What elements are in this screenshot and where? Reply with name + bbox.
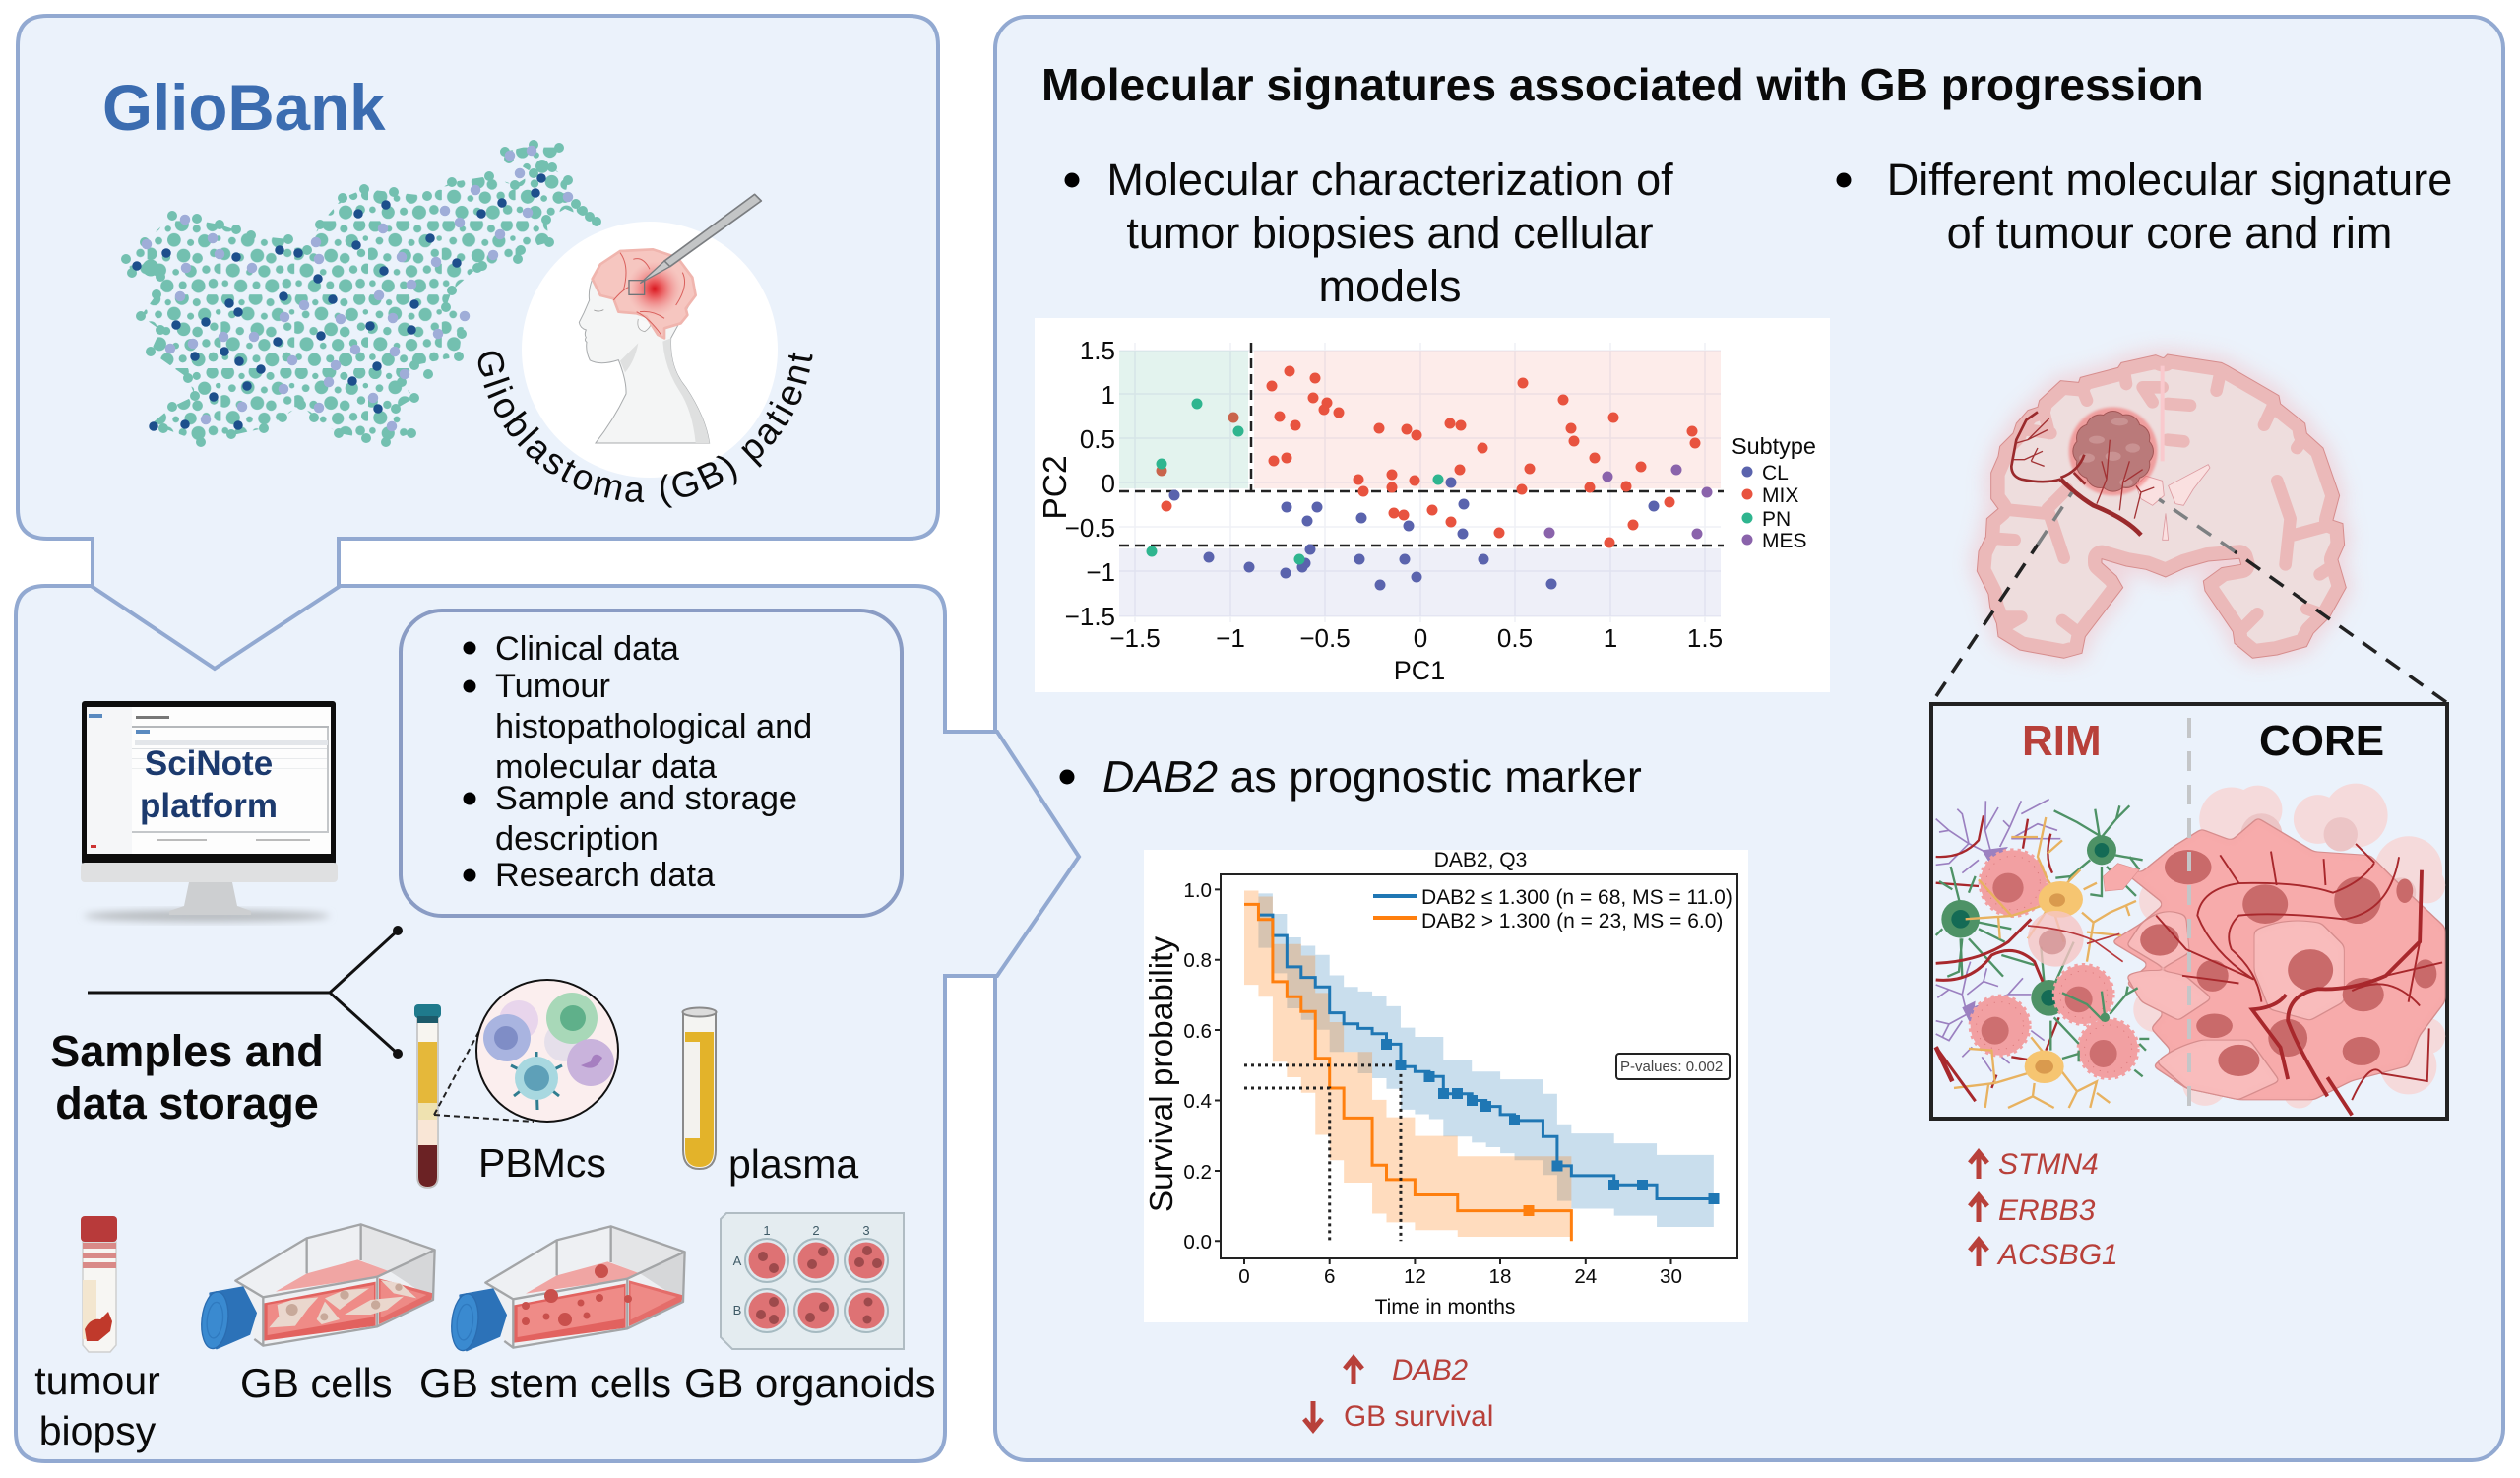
km chart title: DAB2, Q3	[1434, 849, 1527, 871]
map of Slovenia in dots	[126, 145, 597, 442]
axis tick labels: −0.5	[1065, 513, 1115, 543]
km tick labels: 0	[1238, 1265, 1250, 1288]
p-value box: P-values: 0.002	[1620, 1059, 1723, 1075]
text box: data types: description	[495, 820, 659, 858]
curve blue	[1258, 915, 1714, 1198]
legend: subtype: PN	[1762, 508, 1791, 531]
icon: plasma tube	[683, 1008, 717, 1169]
icon: organoid well plate: 1	[763, 1223, 771, 1238]
dashed zoom lines from brain to box	[1936, 492, 2446, 702]
text box: data types: Tumour	[495, 668, 610, 705]
axis tick labels: −1.5	[1109, 623, 1161, 653]
label: SciNote platform: SciNote	[145, 744, 273, 783]
axis tick labels: 1.5	[1080, 336, 1115, 365]
icon: flask GB stem cells	[449, 1226, 685, 1352]
bullet: molecular characterization: tumor biopsies and cellular	[1126, 208, 1654, 258]
p-value box	[1616, 1054, 1730, 1079]
bullet: core and rim signature	[1837, 155, 2452, 258]
legend: subtype: MIX	[1762, 484, 1798, 507]
legend: subtype: Subtype	[1732, 433, 1816, 459]
label: RIM: RIM	[2022, 717, 2102, 765]
axis tick labels: 1.5	[1687, 623, 1723, 653]
km tick labels: 1.0	[1183, 879, 1212, 902]
icon: blood tube	[414, 1004, 441, 1188]
axis tick labels: 0	[1102, 469, 1115, 498]
bullet: molecular characterization: models	[1318, 261, 1462, 311]
axis tick labels: 1	[1102, 380, 1115, 410]
bullet: core and rim signature: Different molecular signature	[1887, 155, 2452, 205]
bullet: molecular characterization	[1065, 155, 1673, 311]
arrow up: DAB2	[1345, 1358, 1362, 1384]
label: PBMcs: PBMcs	[478, 1140, 606, 1186]
chart: PCA scatter plot	[1035, 318, 1830, 692]
heading: GlioBank: GlioBank	[102, 72, 386, 144]
panel: analysis	[995, 17, 2503, 1460]
panel: rim and core illustration	[1931, 704, 2447, 1119]
dashed zoom lines to PBMC	[434, 1029, 534, 1122]
icon: organoid well plate: 2	[812, 1223, 820, 1238]
label: GB organoids: GB organoids	[684, 1360, 936, 1406]
text box: data types: molecular data	[495, 748, 718, 786]
km tick labels: 12	[1404, 1265, 1426, 1288]
label: Glioblastoma (GB) patient curved: Glioblastoma (GB) patient	[478, 351, 813, 508]
icon: organoid well plate	[721, 1213, 904, 1349]
confidence band orange	[1244, 890, 1571, 1237]
median lines	[1244, 1065, 1401, 1241]
panel: samples and data storage	[16, 586, 1079, 1461]
axis tick labels: −0.5	[1299, 623, 1351, 653]
axis tick labels: 0.5	[1080, 424, 1115, 454]
curve orange	[1244, 904, 1571, 1241]
km y axis title: Survival probability	[1144, 936, 1180, 1212]
core tumour cells	[2110, 784, 2445, 1115]
rim neurons and glia	[1936, 800, 2149, 1108]
km tick labels: 0.8	[1183, 949, 1212, 972]
km tick labels	[1183, 879, 1682, 1288]
label: SciNote platform: platform	[140, 787, 278, 825]
km legend	[1373, 886, 1732, 932]
arrow down: GB survival	[1304, 1401, 1322, 1430]
icon: organoid well plate: A	[733, 1253, 742, 1268]
axis tick labels: −1	[1086, 557, 1115, 587]
km tick labels: 0.0	[1183, 1231, 1212, 1253]
gene list: rim markers: ACSBG1	[1996, 1239, 2118, 1271]
heading: Samples and data storage: data storage	[55, 1078, 319, 1128]
icon: patient head with brain and scalpel	[522, 194, 778, 478]
icon: organoid well plate: B	[733, 1303, 741, 1317]
chart: Kaplan-Meier survival plot	[1144, 849, 1748, 1322]
text box: data types: Clinical data	[495, 630, 680, 668]
gene list: rim markers: STMN4	[1998, 1148, 2099, 1181]
axis tick labels: 1	[1604, 623, 1617, 653]
icon: SciNote monitor	[81, 701, 338, 922]
label: tumour biopsy: biopsy	[39, 1408, 157, 1453]
axis title PC2: PC2	[1038, 455, 1074, 520]
km tick labels: 0.2	[1183, 1161, 1212, 1184]
bullet: core and rim signature: of tumour core and rim	[1947, 208, 2392, 258]
text box: data types: Research data	[495, 857, 716, 894]
icon: PBMC circle	[476, 980, 618, 1122]
illustration: coronal brain with tumour	[1977, 354, 2346, 658]
km tick labels: 24	[1574, 1265, 1597, 1288]
km legend: DAB2 ≤ 1.300 (n = 68, MS = 11.0)	[1421, 886, 1732, 909]
km tick labels: 0.4	[1183, 1090, 1212, 1113]
heading: Samples and data storage: Samples and	[50, 1026, 324, 1076]
label: GB cells: GB cells	[240, 1360, 393, 1406]
bullet: DAB2 prognostic marker: DAB2 as prognostic marker	[1102, 752, 1642, 802]
icon: tumour biopsy vial	[81, 1216, 117, 1352]
axis tick labels: 0.5	[1497, 623, 1533, 653]
km tick labels: 18	[1489, 1265, 1511, 1288]
text box: data types	[401, 610, 902, 916]
axis tick labels: −1.5	[1065, 602, 1115, 631]
label: DAB2: DAB2	[1392, 1354, 1468, 1386]
legend: subtype: CL	[1762, 462, 1789, 484]
icon: organoid well plate: 3	[862, 1223, 870, 1238]
gene list: rim markers: ERBB3	[1998, 1194, 2096, 1227]
label: plasma: plasma	[728, 1141, 858, 1187]
km tick labels: 30	[1660, 1265, 1682, 1288]
km tick labels: 6	[1324, 1265, 1335, 1288]
legend: subtype: MES	[1762, 530, 1807, 552]
text box: data types: histopathological and	[495, 708, 812, 745]
label: CORE: CORE	[2259, 717, 2384, 765]
heading: Molecular signatures: Molecular signatures associated with GB progression	[1041, 59, 2204, 110]
bullet: molecular characterization: Molecular characterization of	[1106, 155, 1673, 205]
label: tumour biopsy: tumour	[34, 1358, 160, 1403]
axis tick labels: −1	[1216, 623, 1245, 653]
gene list: rim markers	[1970, 1148, 2118, 1271]
legend: subtype	[1732, 433, 1816, 552]
km x axis title: Time in months	[1375, 1296, 1515, 1318]
km tick labels: 0.6	[1183, 1020, 1212, 1043]
label: GB stem cells: GB stem cells	[419, 1360, 671, 1406]
text box: data types: Sample and storage	[495, 780, 797, 817]
axis tick labels	[1065, 336, 1723, 653]
icon: flask GB cells	[199, 1224, 435, 1350]
axis tick labels: 0	[1414, 623, 1427, 653]
confidence band blue	[1258, 893, 1714, 1227]
axis title PC1: PC1	[1394, 656, 1445, 685]
connector lines	[88, 926, 403, 1059]
panel: GlioBank	[18, 16, 938, 669]
km legend: DAB2 > 1.300 (n = 23, MS = 6.0)	[1421, 910, 1723, 932]
label: GB survival: GB survival	[1344, 1400, 1493, 1433]
